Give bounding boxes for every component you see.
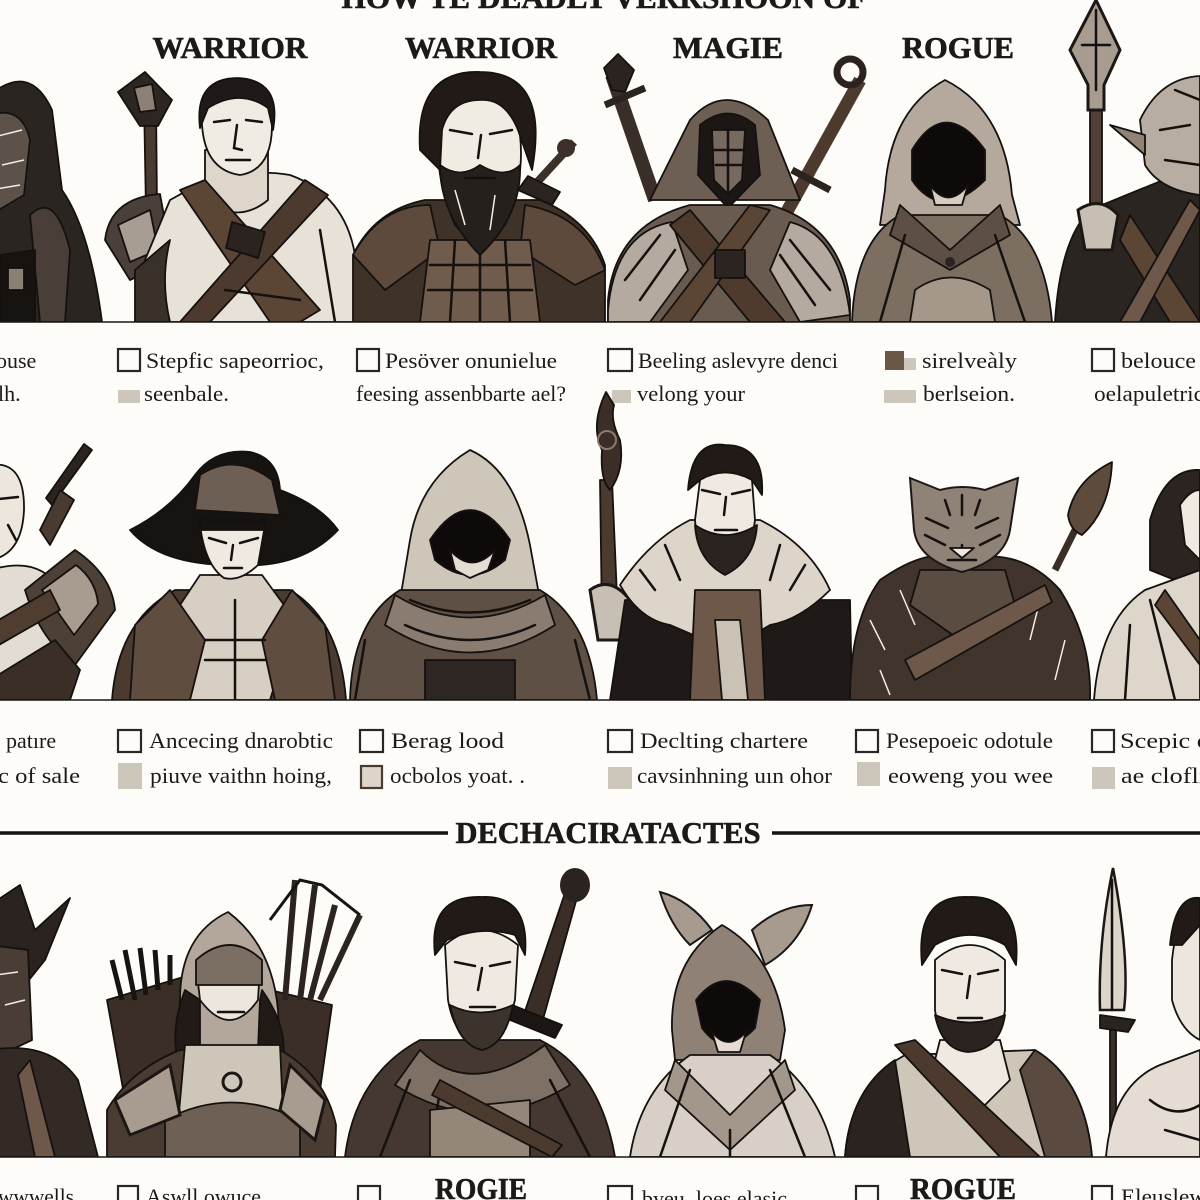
character: fur-coated man with staff xyxy=(590,392,852,700)
row 2 labels: c of sale xyxy=(0,763,80,788)
row 2 labels: eoweng you wee xyxy=(888,763,1053,788)
row 1 labels: Beeling aslevyre denci xyxy=(638,348,838,373)
row 2 labels: patıre xyxy=(6,728,56,753)
row 2 labels: ocbolos yoat. . xyxy=(390,763,525,788)
row 1 labels: Stepfic sapeorrioc, xyxy=(146,348,324,373)
row 2 baseline xyxy=(0,699,1200,701)
row 2 labels xyxy=(0,728,1200,789)
character: hooded figure at left edge xyxy=(0,82,102,322)
character: bald armoured fighter xyxy=(0,444,115,700)
row 2 labels: Pesepoeic odotule xyxy=(886,728,1053,753)
character: cat-folk in fur xyxy=(850,462,1112,700)
character: spearman at right edge xyxy=(1100,868,1200,1157)
character: man with bandolier xyxy=(845,897,1092,1157)
row 2 labels: Scepic o xyxy=(1120,728,1200,753)
character: bearded warrior xyxy=(353,72,605,322)
row 1 labels xyxy=(0,348,1200,406)
character: warrior with staff xyxy=(105,72,355,322)
column headings: WARRIOR xyxy=(152,30,308,65)
character: hooded figure with ears xyxy=(630,892,835,1157)
column headings: WARRIOR xyxy=(405,30,558,65)
character: masked archer xyxy=(107,880,360,1157)
character: orc with spear xyxy=(1055,0,1200,322)
row 1 labels: seenbale. xyxy=(144,381,229,406)
row 2 labels: Declting chartere xyxy=(640,728,808,753)
row 1 labels: sirelveàly xyxy=(922,348,1017,373)
column headings: ROGUE xyxy=(902,30,1014,65)
row 1 labels: velong your xyxy=(637,381,746,406)
row 1 labels: belouce xyxy=(1121,348,1196,373)
row 2 labels: Ancecing dnarobtic xyxy=(149,728,333,753)
row 1 labels: Pesöver onunielue xyxy=(385,348,557,373)
row 1 characters xyxy=(0,0,1200,322)
row 2 labels: piuve vaithn hoing, xyxy=(150,763,332,788)
character: woman at right edge xyxy=(1094,470,1200,700)
row 2 labels: cavsinhning uın ohor xyxy=(637,763,833,788)
character: brute with wide hat xyxy=(0,885,98,1157)
column headings xyxy=(152,30,1014,65)
row 2 labels: ae cloflı xyxy=(1121,763,1200,788)
section divider heading: DECHACIRATACTES xyxy=(456,815,760,850)
row 1 labels: berlseion. xyxy=(923,381,1015,406)
character: man with sword and cloak xyxy=(345,868,615,1157)
row 1 labels: oelapuletric xyxy=(1094,381,1200,406)
row 3 baseline xyxy=(0,1156,1200,1158)
row 3 characters xyxy=(0,868,1200,1157)
column headings: MAGIE xyxy=(673,30,783,65)
row 1 baseline xyxy=(0,321,1200,323)
character: helmeted mage with swords xyxy=(604,54,863,322)
character: wizard with wide hat xyxy=(112,451,346,700)
row 2 characters xyxy=(0,392,1200,700)
character: hooded rogue xyxy=(852,80,1052,322)
row 2 labels: Berag lood xyxy=(391,728,504,753)
row 3 labels xyxy=(0,1171,1200,1200)
character: hooded figure xyxy=(350,450,597,700)
row 1 labels: feesing assenbbarte ael? xyxy=(356,381,566,406)
